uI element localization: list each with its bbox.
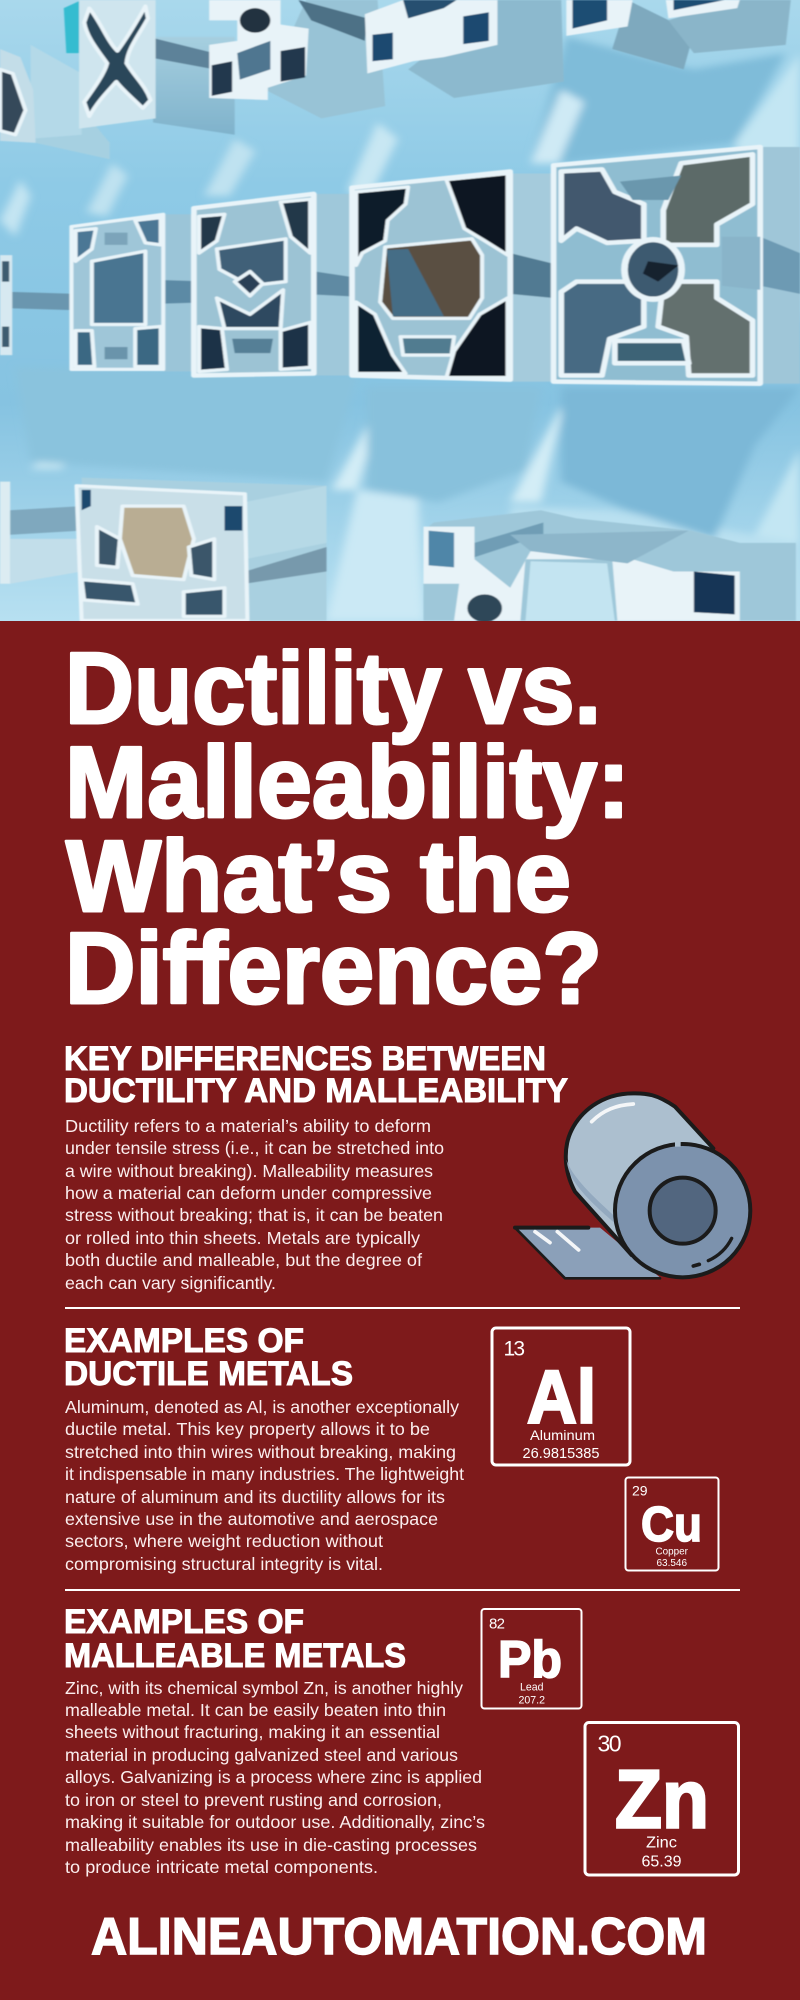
title: Ductility vs. <box>65 633 601 745</box>
text block: zinc <box>65 1678 485 1877</box>
text block: definitions: both ductile and malleable, but the degree of <box>65 1250 422 1270</box>
text block: zinc: making it suitable for outdoor use. Additionally, zinc’s <box>65 1812 485 1832</box>
element tile: lead: 207.2 <box>518 1694 545 1706</box>
text block: definitions: Ductility refers to a material’s ability to deform <box>65 1116 431 1136</box>
element tile: aluminum: 26.9815385 <box>522 1446 600 1462</box>
bottom-right profile <box>423 510 796 620</box>
divider <box>65 1589 740 1591</box>
text block: definitions: a wire without breaking). Malleability measures <box>65 1161 433 1181</box>
panel: ductile metals <box>64 1322 718 1574</box>
element tile: copper: Copper <box>656 1546 689 1558</box>
bottom row <box>0 478 796 622</box>
text block: definitions: or rolled into thin sheets. Metals are typically <box>65 1228 420 1248</box>
element tile: lead <box>482 1609 582 1708</box>
element tile: lead: 82 <box>489 1616 505 1632</box>
heading: malleable metals: MALLEABLE METALS <box>64 1637 406 1675</box>
text block: zinc: material in producing galvanized steel and various <box>65 1745 458 1765</box>
title: Malleability: <box>65 727 630 839</box>
photo: aluminum extrusion profiles on a blue wall <box>0 0 800 622</box>
element tile: zinc: 65.39 <box>642 1854 682 1870</box>
element tile: lead: Pb <box>498 1631 562 1689</box>
text block: aluminum: compromising structural integrity is vital. <box>65 1554 383 1574</box>
element tile: aluminum <box>492 1328 630 1465</box>
text block: zinc: Zinc, with its chemical symbol Zn, is another highly <box>65 1678 463 1698</box>
panel: malleable metals <box>64 1603 738 1877</box>
element tile: copper: 29 <box>632 1482 648 1498</box>
element tile: zinc: Zinc <box>646 1834 677 1852</box>
text block: aluminum: stretched into thin wires without breaking, making <box>65 1442 456 1462</box>
panel: key differences <box>64 1040 750 1293</box>
text block: definitions: each can vary significantly. <box>65 1273 276 1293</box>
element tile: zinc: 30 <box>598 1730 622 1756</box>
element tile: aluminum: Aluminum <box>530 1427 595 1443</box>
heading: key differences <box>64 1040 568 1110</box>
text block: aluminum <box>65 1397 464 1574</box>
text block: aluminum: sectors, where weight reduction without <box>65 1531 383 1551</box>
text block: definitions: under tensile stress (i.e., it can be stretched into <box>65 1138 444 1158</box>
third profile <box>194 194 314 376</box>
text block: aluminum: it indispensable in many industries. The lightweight <box>65 1464 464 1484</box>
element tile: zinc <box>585 1722 738 1875</box>
text block: definitions: how a material can deform under compressive <box>65 1183 432 1203</box>
element tile: aluminum: Al <box>527 1354 596 1438</box>
title <box>65 633 630 1025</box>
heading: malleable metals <box>64 1603 406 1675</box>
element tile: copper: 63.546 <box>656 1558 687 1569</box>
element tile: zinc: Zn <box>615 1752 709 1846</box>
heading: malleable metals: EXAMPLES OF <box>64 1603 304 1641</box>
heading: ductile metals <box>64 1322 353 1393</box>
text block: aluminum: ductile metal. This key property allows it to be <box>65 1419 430 1439</box>
title: What’s the <box>66 821 571 933</box>
fourth profile <box>71 214 163 369</box>
text block: aluminum: Aluminum, denoted as Al, is another exceptionally <box>65 1397 459 1417</box>
text block: definitions <box>65 1116 444 1293</box>
text block: zinc: sheets without fracturing, making it an essential <box>65 1722 440 1742</box>
middle row extrusions and profiles <box>0 147 800 384</box>
text block: zinc: malleability enables its use in die-casting processes <box>65 1835 477 1855</box>
element tile: lead: Lead <box>520 1682 544 1694</box>
heading: ductile metals: EXAMPLES OF <box>64 1322 304 1360</box>
heading: key differences: KEY DIFFERENCES BETWEEN <box>64 1040 546 1078</box>
text block: zinc: to produce intricate metal components. <box>65 1857 378 1877</box>
big profile <box>554 147 760 384</box>
icon: metal sheet roll <box>515 1093 750 1278</box>
text block: aluminum: extensive use in the automotive and aerospace <box>65 1509 438 1529</box>
element tile: copper: Cu <box>641 1498 702 1552</box>
text block: aluminum: nature of aluminum and its ductility allows for its <box>65 1487 445 1507</box>
divider <box>65 1307 740 1309</box>
heading: ductile metals: DUCTILE METALS <box>64 1355 353 1393</box>
text block: zinc: alloys. Galvanizing is a process where zinc is applied <box>65 1767 482 1787</box>
dark profile <box>352 171 510 380</box>
heading: key differences: DUCTILITY AND MALLEABILITY <box>64 1072 568 1110</box>
text block: definitions: stress without breaking; that is, it can be beaten <box>65 1205 443 1225</box>
element tile: aluminum: 13 <box>504 1338 525 1360</box>
footer: website url: ALINEAUTOMATION.COM <box>91 1908 707 1966</box>
text block: zinc: malleable metal. It can be easily beaten into thin <box>65 1700 446 1720</box>
top row <box>0 0 791 159</box>
title: Difference? <box>65 913 602 1025</box>
background panel: dark red <box>0 621 800 2000</box>
element tile: copper <box>626 1478 718 1570</box>
text block: zinc: to iron or steel to prevent rusting and corrosion, <box>65 1790 442 1810</box>
